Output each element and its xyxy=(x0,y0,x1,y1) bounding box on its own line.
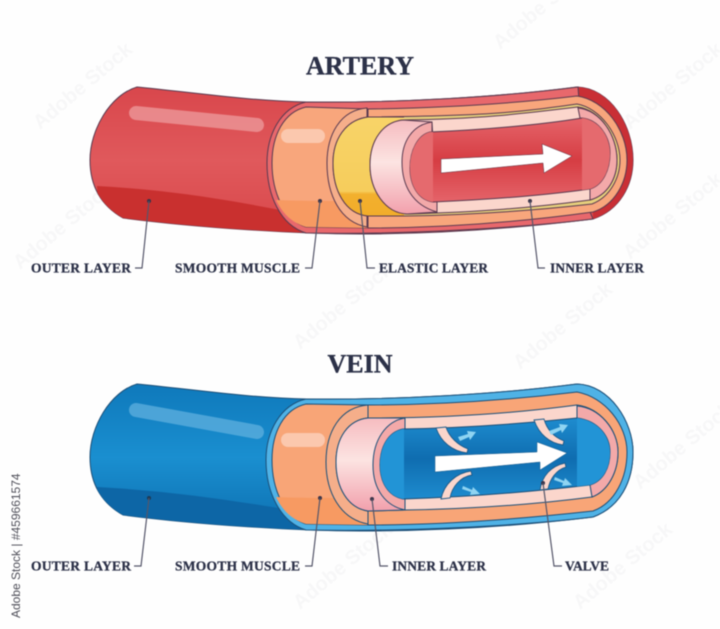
artery illustration xyxy=(90,87,633,240)
vein label: inner layer xyxy=(370,497,486,574)
artery smooth muscle xyxy=(272,96,627,228)
artery label: smooth muscle: SMOOTH MUSCLE xyxy=(175,260,300,276)
vein label: outer layer xyxy=(31,496,151,574)
artery label: outer layer xyxy=(31,199,151,276)
artery label: outer layer: OUTER LAYER xyxy=(31,260,131,276)
artery label: smooth muscle xyxy=(175,199,322,276)
watermark: Adobe Stock xyxy=(289,518,398,614)
watermark: Adobe Stock xyxy=(569,518,678,614)
artery lumen xyxy=(408,116,612,204)
vein flow arrow xyxy=(435,442,567,472)
vein lumen xyxy=(378,416,612,500)
artery label: inner layer: INNER LAYER xyxy=(550,260,644,276)
vein label: inner layer: INNER LAYER xyxy=(392,558,486,574)
watermark: Adobe Stock xyxy=(509,278,618,374)
watermark: Adobe Stock xyxy=(289,258,398,354)
vein outer layer xyxy=(90,384,633,537)
artery inner layer xyxy=(370,107,617,214)
watermark: Adobe Stock xyxy=(29,38,138,134)
title: artery: ARTERY xyxy=(306,52,414,80)
stock credit: Adobe Stock | #459661574 xyxy=(9,473,23,618)
artery wall pink strip xyxy=(267,87,593,233)
vein label: smooth muscle xyxy=(175,496,322,574)
vein small flow arrows xyxy=(458,424,572,495)
title: vein: VEIN xyxy=(327,350,393,378)
vein label: valve xyxy=(541,481,609,574)
vein inner layer xyxy=(336,405,618,511)
artery label: inner layer xyxy=(528,199,644,276)
artery label: elastic layer xyxy=(358,199,488,276)
vein label: smooth muscle: SMOOTH MUSCLE xyxy=(175,558,300,574)
vein label: outer layer: OUTER LAYER xyxy=(31,558,131,574)
artery outer layer xyxy=(90,87,633,240)
artery elastic layer xyxy=(333,104,620,216)
artery flow arrow xyxy=(441,144,572,173)
vein illustration xyxy=(90,384,633,537)
watermark: Adobe Stock xyxy=(9,178,118,274)
vein wall blue strip xyxy=(266,384,633,530)
vein valves xyxy=(436,419,566,499)
vein label: valve: VALVE xyxy=(565,558,609,574)
artery label: elastic layer: ELASTIC LAYER xyxy=(379,260,488,276)
vein smooth muscle xyxy=(272,392,627,525)
